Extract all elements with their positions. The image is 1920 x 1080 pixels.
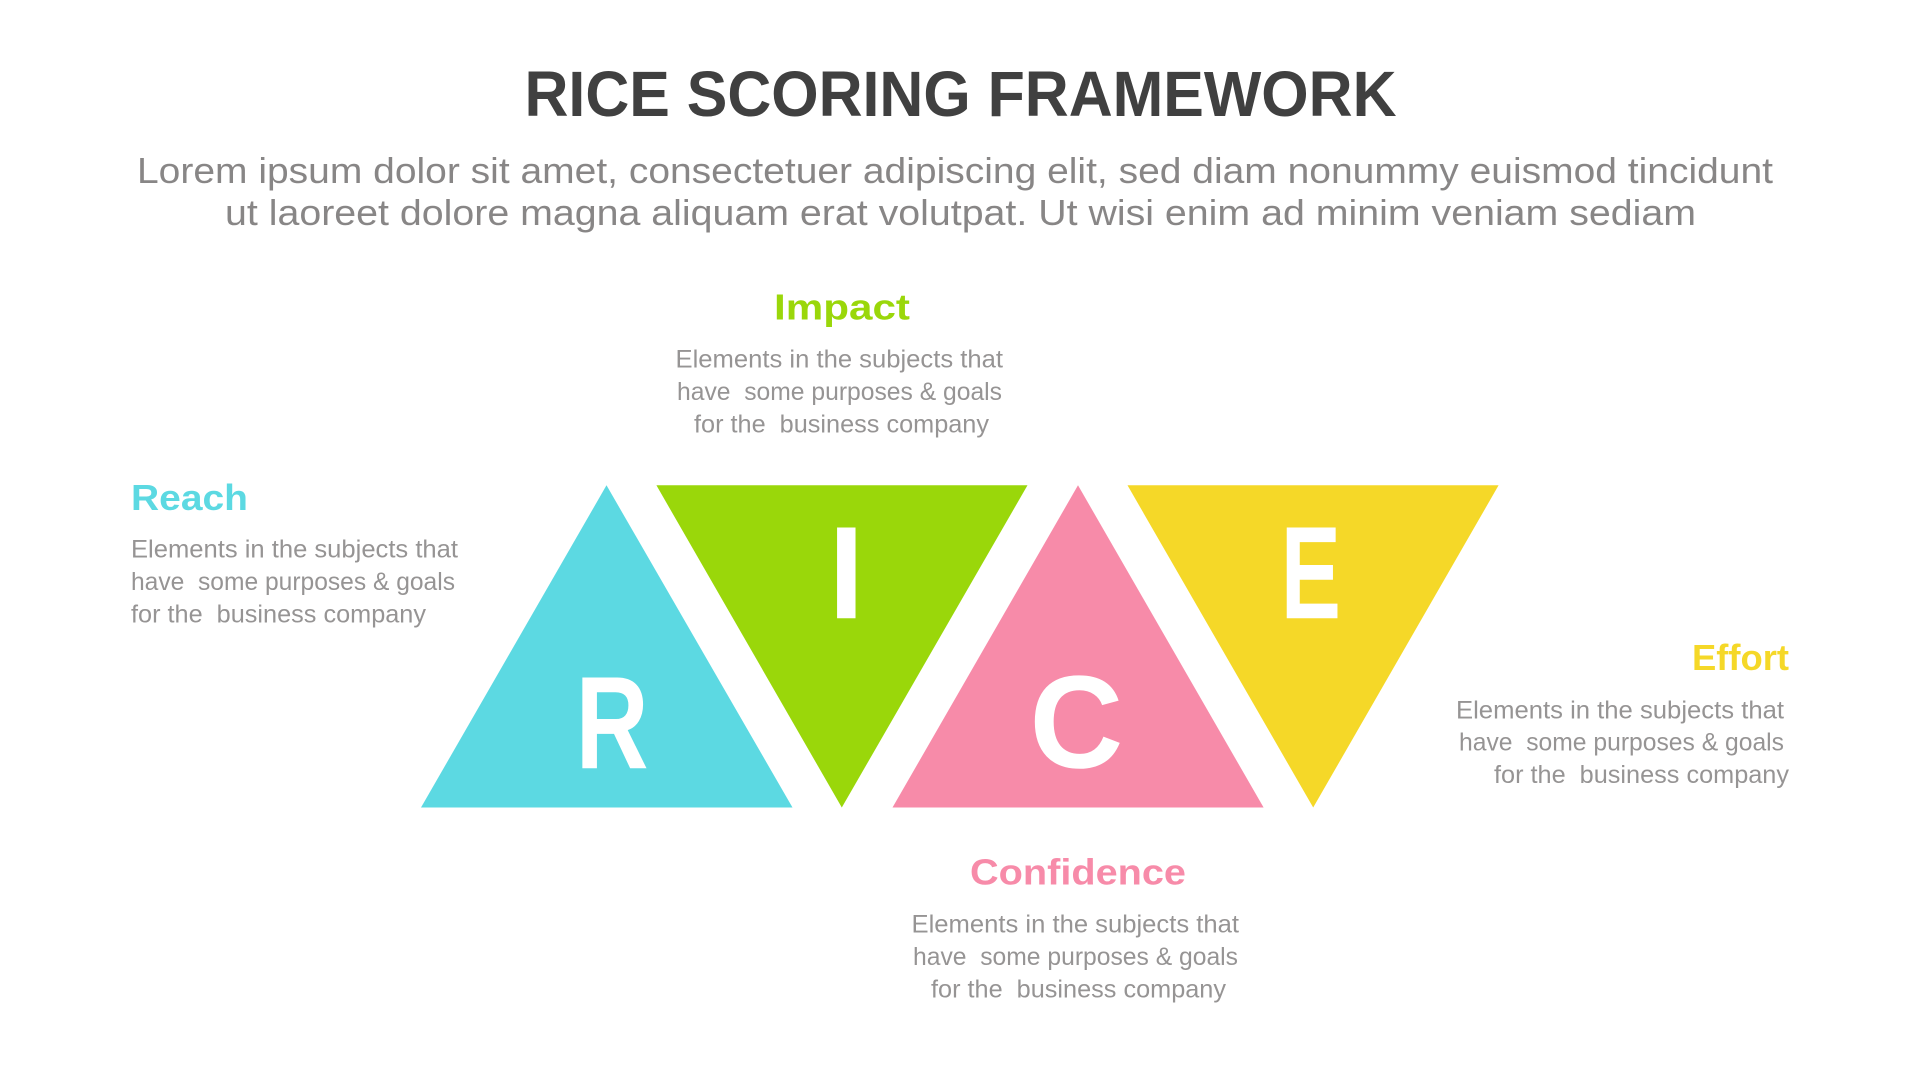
text block: Effort description: Elements in the subjects that [1456, 696, 1784, 724]
text block: Impact description [676, 346, 1003, 438]
heading: Effort: Effort [1692, 637, 1789, 678]
subtitle text block: ut laoreet dolore magna aliquam erat volutpat. Ut wisi enim ad minim veniam sediam [225, 192, 1696, 233]
text block: Effort description: for the business company [1494, 761, 1789, 789]
subtitle text block: Lorem ipsum dolor sit amet, consectetuer adipiscing elit, sed diam nonummy euismod tincidunt [137, 150, 1773, 191]
panel: RICE triangles [421, 485, 1499, 808]
triangle R [421, 485, 792, 808]
text block: Impact description: have some purposes & goals [677, 378, 1002, 406]
text block: Confidence description: for the business company [931, 976, 1226, 1004]
heading: Reach: Reach [131, 477, 248, 518]
triangle C: C [1030, 648, 1123, 796]
heading: Confidence: Confidence [970, 851, 1186, 892]
triangle C [892, 485, 1264, 808]
panel: Effort [1456, 637, 1789, 789]
panel: Reach [131, 477, 458, 628]
text block: Confidence description: have some purposes & goals [913, 943, 1238, 971]
panel: Impact [676, 286, 1003, 438]
text block: Reach description: for the business company [131, 600, 426, 628]
text block: Reach description: have some purposes & goals [131, 568, 455, 596]
triangle E [1128, 485, 1499, 808]
text block: Impact description: Elements in the subjects that [676, 346, 1003, 374]
triangle E: E [1281, 499, 1341, 646]
text block: Confidence description: Elements in the subjects that [912, 911, 1239, 939]
heading: Impact: Impact [774, 286, 910, 327]
triangle R: R [576, 649, 649, 796]
subtitle text block [137, 150, 1773, 233]
triangle I: I [828, 499, 864, 646]
triangle I [656, 485, 1028, 808]
text block: Effort description [1456, 696, 1789, 789]
panel: Confidence [912, 851, 1239, 1004]
text block: Impact description: for the business company [694, 410, 989, 438]
text block: Reach description: Elements in the subjects that [131, 536, 458, 564]
text block: Effort description: have some purposes & goals [1459, 729, 1784, 757]
text block: Reach description [131, 536, 458, 628]
title: RICE SCORING FRAMEWORK [524, 58, 1396, 130]
text block: Confidence description [912, 911, 1239, 1004]
